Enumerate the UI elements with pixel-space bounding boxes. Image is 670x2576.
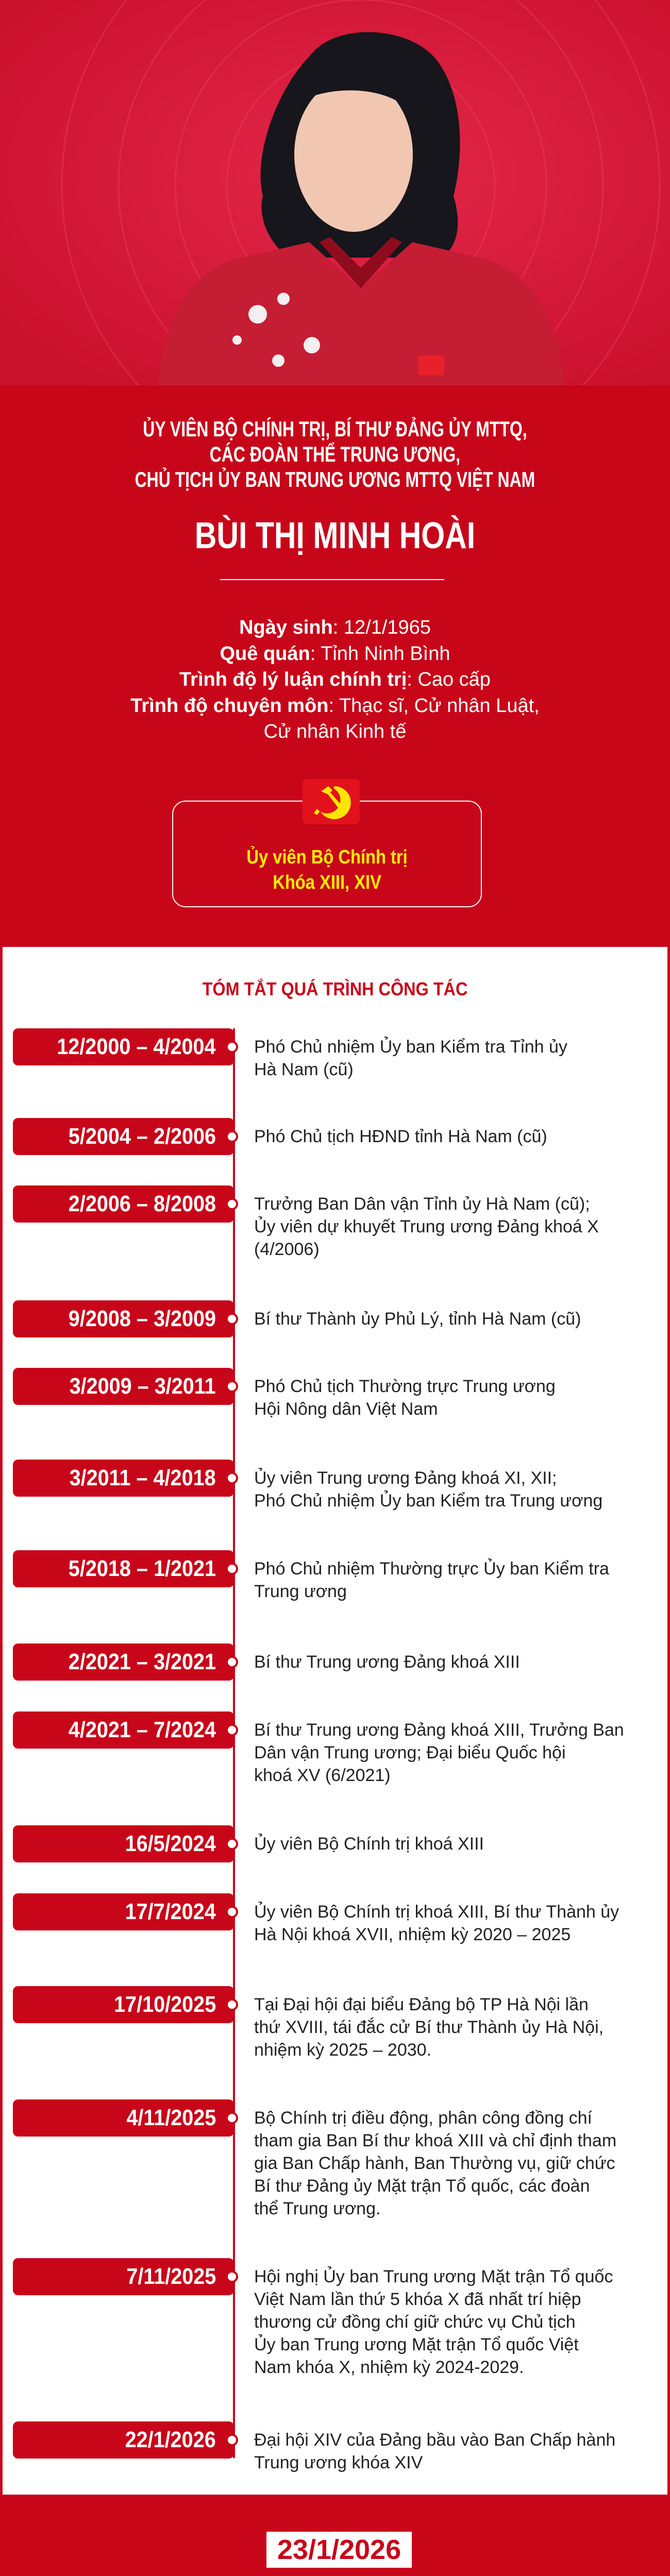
- entry 5: Hội Nông dân Việt Nam: [254, 1399, 438, 1419]
- entry 10: 16/5/2024: [125, 1831, 216, 1856]
- entry 14: [13, 2258, 613, 2377]
- entry 14: 7/11/2025: [126, 2264, 216, 2289]
- heading: TÓM TẮT QUÁ TRÌNH CÔNG TÁC: [203, 978, 467, 999]
- entry 6: [13, 1460, 602, 1511]
- portrait photo: [0, 0, 670, 385]
- entry 9: Dân vận Trung ương; Đại biểu Quốc hội: [254, 1743, 566, 1762]
- entry 13: tham gia Ban Bí thư khoá XIII và chỉ định tham: [254, 2131, 616, 2150]
- entry 7: 5/2018 – 1/2021: [69, 1556, 216, 1581]
- entry 2: 5/2004 – 2/2006: [69, 1124, 216, 1149]
- politburo box: [172, 779, 482, 907]
- title: positions: [135, 417, 535, 492]
- entry 14: thương cử đồng chí giữ chức vụ Chủ tịch: [254, 2312, 576, 2332]
- entry 7: [13, 1550, 609, 1601]
- entry 6: Phó Chủ nhiệm Ủy ban Kiểm tra Trung ương: [254, 1491, 602, 1511]
- panel: career timeline: [3, 947, 667, 2495]
- timeline line: [233, 1028, 235, 2458]
- box outline: [172, 801, 482, 907]
- entry 1: Phó Chủ nhiệm Ủy ban Kiểm tra Tỉnh ủy: [254, 1037, 567, 1057]
- entry 5: 3/2009 – 3/2011: [70, 1374, 216, 1399]
- entry 8: 2/2021 – 3/2021: [69, 1649, 216, 1674]
- entry 14: Nam khóa X, nhiệm kỳ 2024-2029.: [254, 2358, 524, 2377]
- date badge: 23/1/2026: [277, 2534, 401, 2565]
- entry 13: gia Ban Chấp hành, Ban Thường vụ, giữ chức: [254, 2154, 615, 2173]
- entry 12: thứ XVIII, tái đắc cử Bí thư Thành ủy Hà Nội,: [254, 2018, 604, 2037]
- entry 7: Trung ương: [254, 1582, 347, 1601]
- entry 3: (4/2006): [254, 1240, 320, 1259]
- entry 13: thể Trung ương.: [254, 2199, 380, 2218]
- entry 5: [13, 1368, 556, 1419]
- entry 3: 2/2006 – 8/2008: [69, 1191, 216, 1216]
- entry 13: [13, 2099, 616, 2218]
- entry 14: Hội nghị Ủy ban Trung ương Mặt trận Tổ quốc: [254, 2267, 613, 2286]
- entry 1: [13, 1028, 567, 1079]
- yellow text: [246, 846, 408, 893]
- name heading: BÙI THỊ MINH HOÀI: [195, 515, 475, 556]
- entry 15: Trung ương khóa XIV: [254, 2453, 423, 2472]
- entry 10: Ủy viên Bộ Chính trị khoá XIII: [254, 1834, 484, 1854]
- personal info: Trình độ chuyên môn: Thạc sĩ, Cử nhân Luật,: [130, 694, 540, 716]
- entry 9: Bí thư Trung ương Đảng khoá XIII, Trưởng Ban: [254, 1720, 624, 1740]
- divider: [220, 579, 444, 580]
- entry 12: nhiệm kỳ 2025 – 2030.: [254, 2040, 431, 2060]
- entry 8: Bí thư Trung ương Đảng khoá XIII: [254, 1652, 520, 1672]
- entry 15: [13, 2421, 615, 2472]
- entry 12: [13, 1986, 604, 2060]
- personal info: [130, 617, 540, 742]
- entry 1: 12/2000 – 4/2004: [57, 1034, 216, 1059]
- personal info: Ngày sinh: 12/1/1965: [239, 617, 431, 638]
- entry 9: [13, 1711, 624, 1785]
- entry 14: Ủy ban Trung ương Mặt trận Tổ quốc Việt: [254, 2335, 579, 2354]
- entry 14: Việt Nam lần thứ 5 khóa X đã nhất trí hiệp: [254, 2290, 581, 2309]
- personal info: Cử nhân Kinh tế: [264, 721, 406, 742]
- title: positions: ỦY VIÊN BỘ CHÍNH TRỊ, BÍ THƯ ĐẢNG ỦY MTTQ,: [143, 417, 527, 441]
- personal info: Quê quán: Tỉnh Ninh Bình: [220, 643, 450, 665]
- entry 3: Ủy viên dự khuyết Trung ương Đảng khoá X: [254, 1217, 599, 1236]
- entry 13: Bộ Chính trị điều động, phân công đồng chí: [254, 2108, 592, 2128]
- entry 13: 4/11/2025: [126, 2105, 216, 2130]
- entry 13: Bí thư Đảng ủy Mặt trận Tổ quốc, các đoàn: [254, 2176, 590, 2196]
- title: positions: CÁC ĐOÀN THỂ TRUNG ƯƠNG,: [210, 442, 460, 466]
- entry 9: 4/2021 – 7/2024: [69, 1717, 216, 1742]
- entry 6: Ủy viên Trung ương Đảng khoá XI, XII;: [254, 1468, 557, 1488]
- entry 1: Hà Nam (cũ): [254, 1060, 354, 1079]
- entry 11: 17/7/2024: [125, 1899, 216, 1924]
- entry 4: 9/2008 – 3/2009: [69, 1306, 216, 1331]
- entry 4: [13, 1300, 581, 1337]
- yellow text: Khóa XIII, XIV: [273, 872, 381, 893]
- entry 5: Phó Chủ tịch Thường trực Trung ương: [254, 1377, 556, 1396]
- entry 12: Tại Đại hội đại biểu Đảng bộ TP Hà Nội lần: [254, 1995, 589, 2014]
- yellow text: Ủy viên Bộ Chính trị: [246, 846, 408, 868]
- entry 8: [13, 1643, 520, 1681]
- entry 2: Phó Chủ tịch HĐND tỉnh Hà Nam (cũ): [254, 1127, 547, 1146]
- entry 11: Hà Nội khoá XVII, nhiệm kỳ 2020 – 2025: [254, 1925, 571, 1944]
- title: positions: CHỦ TỊCH ỦY BAN TRUNG ƯƠNG MTTQ VIỆT NAM: [135, 467, 535, 492]
- entry 10: [13, 1825, 484, 1862]
- entry 2: [13, 1118, 547, 1155]
- entry 9: khoá XV (6/2021): [254, 1766, 391, 1785]
- personal info: Trình độ lý luận chính trị: Cao cấp: [179, 669, 491, 690]
- entry 7: Phó Chủ nhiệm Thường trực Ủy ban Kiểm tra: [254, 1559, 609, 1579]
- entry 11: Ủy viên Bộ Chính trị khoá XIII, Bí thư Thành ủy: [254, 1902, 619, 1922]
- icon: hammer and sickle: [303, 779, 360, 824]
- entry 15: Đại hội XIV của Đảng bầu vào Ban Chấp hành: [254, 2430, 615, 2450]
- entry 3: Trưởng Ban Dân vận Tỉnh ủy Hà Nam (cũ);: [254, 1194, 590, 1214]
- entry 12: 17/10/2025: [114, 1992, 216, 2017]
- entry 15: 22/1/2026: [125, 2427, 216, 2452]
- entry 3: [13, 1185, 599, 1259]
- entry 6: 3/2011 – 4/2018: [70, 1465, 216, 1490]
- entry 11: [13, 1893, 619, 1944]
- entry 4: Bí thư Thành ủy Phủ Lý, tỉnh Hà Nam (cũ): [254, 1309, 581, 1329]
